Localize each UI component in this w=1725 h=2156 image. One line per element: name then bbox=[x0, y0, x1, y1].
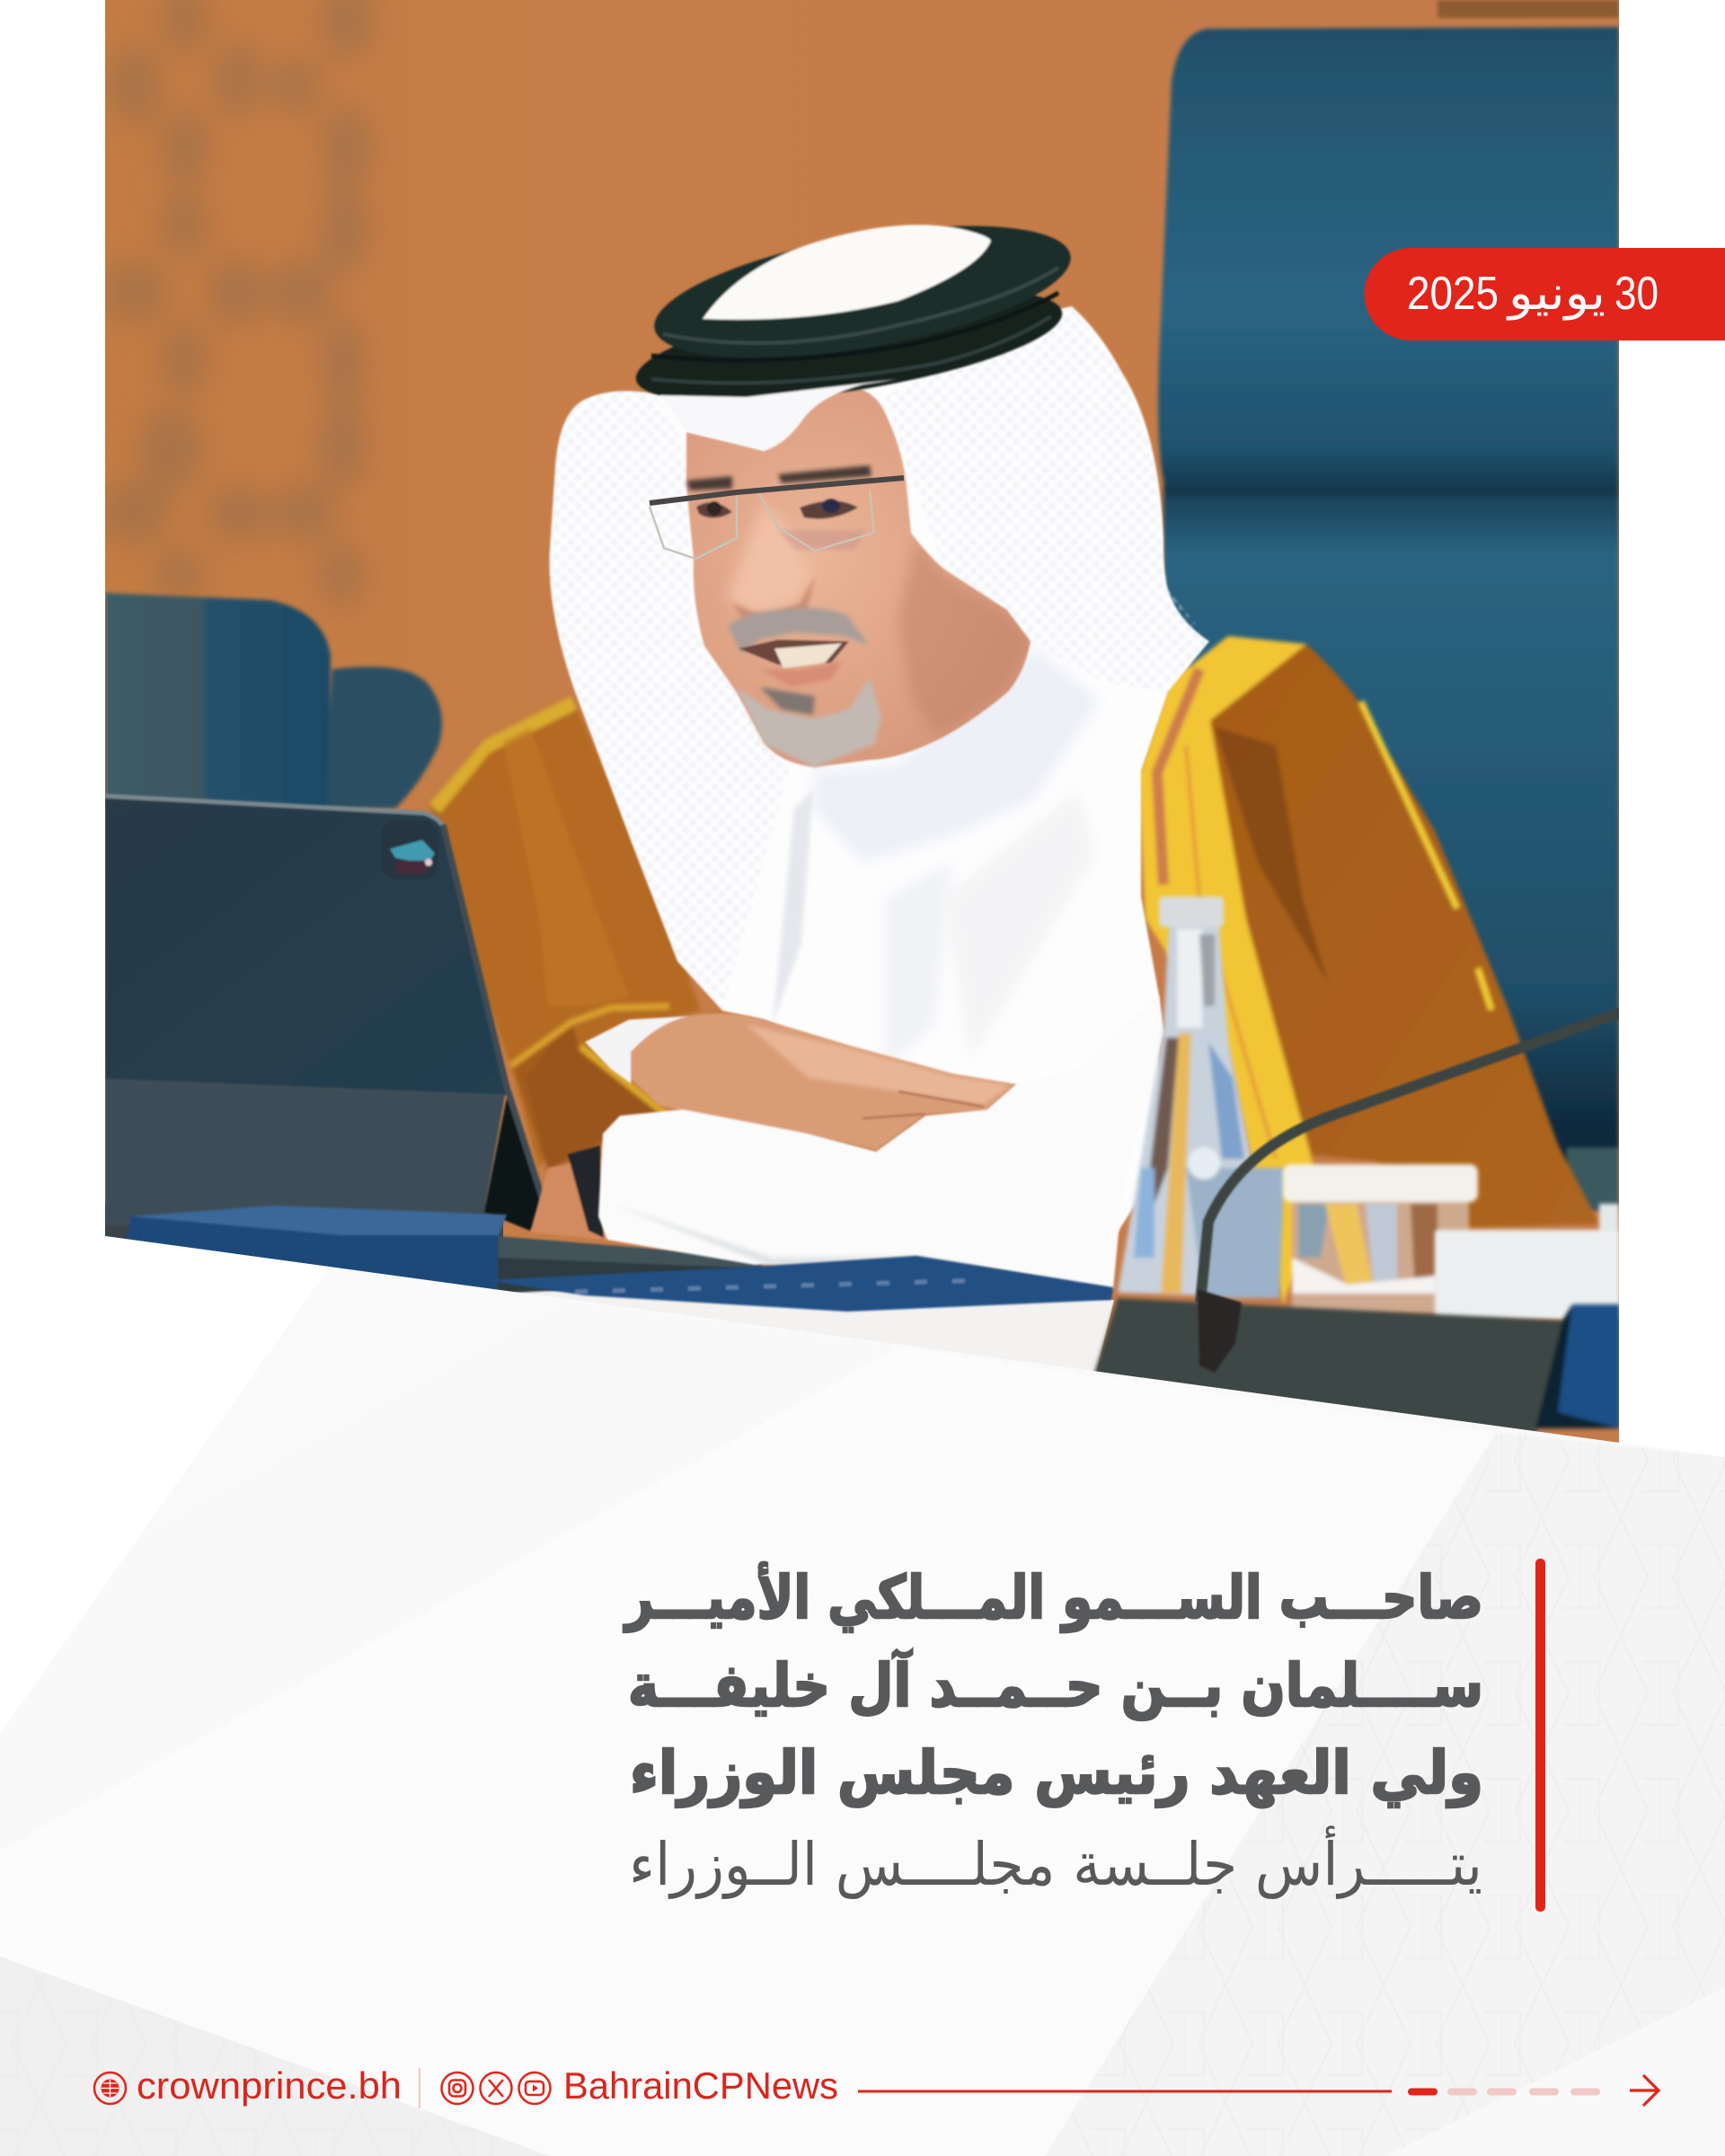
gold-trimmed brown robe, left shoulder bbox=[429, 696, 701, 1171]
large chair behind, right bbox=[1158, 27, 1619, 1211]
glass cup with lid bbox=[1283, 1164, 1478, 1314]
footer bar bbox=[94, 2064, 1659, 2108]
eyeglasses bbox=[650, 478, 904, 559]
table base under objects bbox=[105, 1204, 1114, 1388]
title line 3: ولي العهد رئيس مجلس الوزراء bbox=[630, 1738, 1483, 1808]
white cap bbox=[703, 225, 991, 320]
white card holder, right bbox=[1435, 1204, 1620, 1320]
mouth bbox=[739, 640, 849, 686]
headdress front fold bbox=[660, 379, 898, 451]
title text bbox=[624, 1561, 1483, 1899]
date text bbox=[1407, 267, 1659, 321]
icon: youtube bbox=[519, 2072, 550, 2104]
arrow bbox=[1630, 2075, 1659, 2106]
lower panel with geometric facets bbox=[0, 1204, 1725, 2156]
website text: crownprince.bh bbox=[137, 2064, 402, 2107]
upper agal ring bbox=[645, 200, 1080, 384]
eyebrows bbox=[686, 465, 871, 490]
photo: chairing the cabinet session bbox=[99, 0, 1621, 1455]
glass water bottle bbox=[1118, 897, 1285, 1298]
small chair behind, left bbox=[105, 593, 442, 808]
microphone base bbox=[1092, 1298, 1620, 1437]
footer divider bbox=[419, 2068, 420, 2108]
icon: instagram bbox=[442, 2072, 473, 2104]
beard and goatee bbox=[737, 677, 881, 767]
date text: يونيو bbox=[1506, 267, 1606, 321]
title line 4: يتـــــرأس جلــسة مجلــــس الــوزراء bbox=[629, 1825, 1482, 1899]
eyes bbox=[696, 501, 858, 519]
footer line bbox=[858, 2090, 1392, 2093]
hand bbox=[585, 1013, 1017, 1150]
white thobe and headdress cloth bbox=[550, 306, 1209, 1294]
tablet computer on stand bbox=[105, 795, 548, 1231]
moustache bbox=[728, 608, 870, 654]
icon: globe bbox=[94, 2072, 126, 2104]
headdress cap and black agal rings bbox=[629, 200, 1080, 451]
lower agal ring bbox=[629, 268, 1069, 424]
gold-trimmed brown robe, right shoulder bbox=[1138, 636, 1599, 1304]
date text: 2025 bbox=[1407, 268, 1499, 320]
title line 1: صاحـــب الســـمو المـــلكي الأميـــر bbox=[624, 1561, 1483, 1633]
wrist, watch and tablet keyboard bbox=[498, 1145, 764, 1294]
wall: wooden panel bbox=[99, 0, 1619, 1455]
microphone stem bbox=[1198, 1012, 1621, 1373]
tablet camera bump bbox=[381, 820, 438, 879]
blue folder on table bbox=[485, 1256, 1113, 1312]
blue folder box, left bbox=[126, 1206, 507, 1298]
date text: 30 bbox=[1614, 268, 1659, 320]
pagination dashes bbox=[1408, 2088, 1600, 2095]
date tag bbox=[1364, 248, 1725, 340]
social handle text: BahrainCPNews bbox=[563, 2064, 838, 2107]
face bbox=[686, 386, 1031, 767]
accent bar bbox=[1535, 1559, 1545, 1912]
title line 2: ســــلمان بــن حــمــد آل خليفـــة bbox=[628, 1648, 1483, 1720]
icon: x bbox=[480, 2072, 512, 2104]
white sleeve bbox=[598, 995, 1164, 1289]
